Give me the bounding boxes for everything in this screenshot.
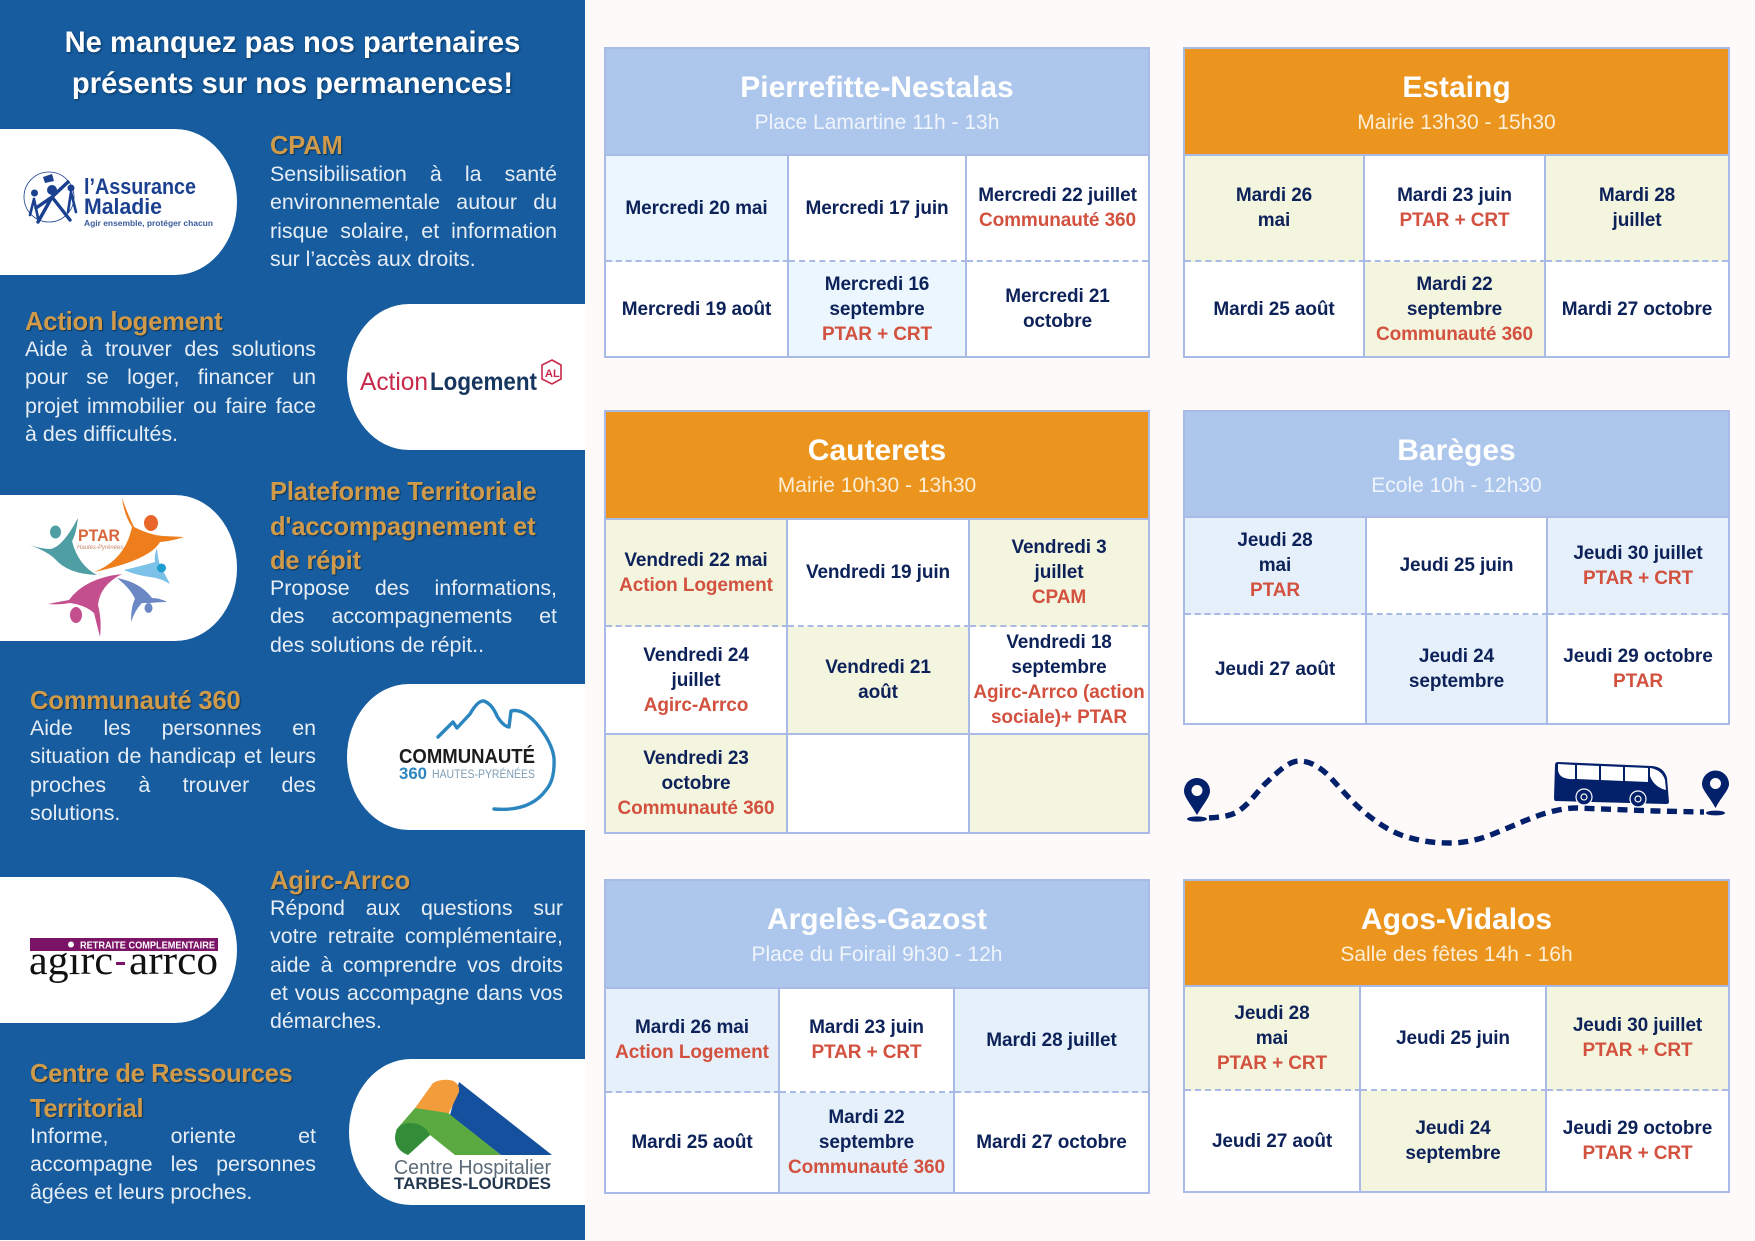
- date: 3 juillet: [970, 520, 1148, 627]
- logo pill: Communauté 360: HAUTES-PYRÉNÉES: [432, 768, 535, 781]
- illustration: bus route: [1184, 758, 1729, 846]
- date: 22 mai: Action Logement: [619, 574, 773, 596]
- schedule: Agos-Vidalos: [1183, 879, 1730, 1193]
- date: 21 août: Vendredi 21: [825, 657, 931, 678]
- logo pill: Action Logement: [347, 304, 585, 450]
- logo pill: Centre Hospitalier Tarbes-Lourdes: TARBES-LOURDES: [394, 1174, 551, 1193]
- schedule: Estaing: [1183, 47, 1730, 358]
- text: Centre de Ressources Territorial: [30, 1060, 316, 1204]
- logo pill: Action Logement: AL: [545, 368, 560, 380]
- text: CPAM: sur l’accès aux droits.: [270, 247, 476, 271]
- date: 27 octobre: Mardi 27 octobre: [976, 1132, 1127, 1153]
- text: Communauté 360: Aide les personnes en: [30, 716, 316, 740]
- date: 22 juillet: [967, 156, 1148, 262]
- date: 18 septembre: [970, 627, 1148, 735]
- date: 26 mai: [1185, 156, 1365, 262]
- date: 22 septembre: Mardi 22: [1416, 274, 1493, 294]
- header: Barèges: Barèges: [1397, 434, 1516, 467]
- date: 30 juillet: Jeudi 30 juillet: [1573, 1015, 1702, 1036]
- header: Agos-Vidalos: Agos-Vidalos: [1361, 903, 1552, 936]
- date: 27 août: [1185, 615, 1367, 723]
- heading: partners title: [65, 27, 521, 101]
- empty cell: [970, 735, 1148, 832]
- header: Cauterets: Cauterets: [808, 434, 946, 467]
- empty cell: [788, 735, 970, 832]
- date: 30 juillet: [1548, 518, 1728, 615]
- date: 16 septembre: [789, 262, 967, 356]
- schedule: Cauterets: [604, 410, 1150, 834]
- header: Pierrefitte-Nestalas: Pierrefitte-Nestalas: [740, 71, 1014, 104]
- date: 28 mai: mai: [1256, 1028, 1288, 1048]
- date: 22 septembre: Communauté 360: [1376, 324, 1533, 344]
- date: 16 septembre: septembre: [829, 298, 925, 320]
- logo pill: Assurance Maladie: Agir ensemble, protéger chacun: [84, 219, 213, 228]
- date: 17 juin: [789, 156, 967, 262]
- schedule: Argelès-Gazost: [604, 879, 1150, 1194]
- date: 30 juillet: PTAR + CRT: [1582, 1040, 1692, 1061]
- date: 23 juin: PTAR + CRT: [1399, 210, 1510, 231]
- date: 28 mai: mai: [1259, 555, 1291, 576]
- logo pill: Centre Hospitalier Tarbes-Lourdes: [349, 1059, 585, 1205]
- date: 17 juin: Mercredi 17 juin: [805, 198, 949, 218]
- date: 27 août: [1185, 1091, 1361, 1191]
- date: 28 juillet: [1546, 156, 1728, 262]
- text: Agirc-Arrco: aide à comprendre vos droits: [270, 953, 563, 977]
- text: Plateforme Territoriale: Propose des informations,: [270, 576, 557, 600]
- date: 24 juillet: Vendredi 24: [643, 644, 749, 666]
- logo pill: PTAR: Hautes-Pyrénées: [77, 545, 123, 551]
- date: 19 juin: [788, 520, 970, 627]
- date: 23 octobre: octobre: [662, 773, 730, 794]
- logo pill: Communauté 360: 360: [399, 764, 427, 783]
- date: 23 octobre: Communauté 360: [618, 798, 774, 819]
- header: Cauterets: Mairie 10h30 - 13h30: [778, 474, 976, 497]
- text: Communauté 360: Communauté 360: [30, 687, 241, 715]
- text: CPAM: CPAM: [270, 132, 343, 160]
- date: 22 septembre: [1365, 262, 1546, 356]
- date: 3 juillet: juillet: [1035, 562, 1083, 583]
- date: 27 août: Jeudi 27 août: [1215, 658, 1335, 680]
- header: Agos-Vidalos: Salle des fêtes 14h - 16h: [1340, 943, 1573, 966]
- logo pill: Agirc-Arrco: agirc: [29, 937, 113, 983]
- header: Argelès-Gazost: [606, 881, 1148, 989]
- text: Centre de Ressources Territorial: âgées et leurs proches.: [30, 1180, 252, 1204]
- date: 29 octobre: Jeudi 29 octobre: [1563, 646, 1713, 667]
- date: 24 septembre: Jeudi 24: [1419, 646, 1494, 667]
- text: Plateforme Territoriale: d'accompagnement et: [270, 512, 535, 540]
- icon: end pin: [1702, 770, 1729, 815]
- date: 18 septembre: sociale)+ PTAR: [991, 707, 1127, 728]
- date: 22 septembre: Mardi 22: [828, 1107, 905, 1128]
- text: CPAM: Sensibilisation à la santé: [270, 162, 557, 186]
- panel: partners sidebar: [0, 0, 585, 1240]
- text: Plateforme Territoriale: de répit: [270, 547, 361, 575]
- date: 25 juin: Jeudi 25 juin: [1396, 1028, 1510, 1048]
- text: Centre de Ressources Territorial: Territorial: [30, 1094, 143, 1122]
- logo pill: Assurance Maladie: l’Assurance: [84, 174, 196, 199]
- date: 22 septembre: septembre: [1407, 298, 1502, 320]
- date: 25 août: Mardi 25 août: [1213, 298, 1335, 320]
- date: 24 juillet: [606, 627, 788, 735]
- logo pill: Centre Hospitalier Tarbes-Lourdes: Centre Hospitalier: [394, 1157, 551, 1179]
- date: 19 juin: Vendredi 19 juin: [806, 562, 950, 583]
- header: Estaing: [1185, 49, 1728, 156]
- date: 25 juin: [1361, 987, 1547, 1091]
- date: 25 août: [1185, 262, 1365, 356]
- date: 24 septembre: [1367, 615, 1548, 723]
- date: 23 juin: Mardi 23 juin: [809, 1017, 924, 1038]
- date: 22 juillet: Communauté 360: [979, 210, 1136, 231]
- date: 22 septembre: [780, 1093, 955, 1192]
- date: 23 octobre: Vendredi 23: [643, 748, 749, 769]
- date: 20 mai: [606, 156, 789, 262]
- date: 23 juin: PTAR + CRT: [811, 1042, 922, 1063]
- date: 22 septembre: Communauté 360: [788, 1157, 945, 1178]
- logo pill: Assurance Maladie: Maladie: [84, 194, 162, 219]
- text: CPAM: environnementale autour du: [270, 190, 557, 214]
- date: 25 août: [606, 1093, 780, 1192]
- header: Barèges: Ecole 10h - 12h30: [1371, 474, 1542, 497]
- text: Action logement: [25, 308, 316, 446]
- header: Argelès-Gazost: Place du Foirail 9h30 - 12h: [752, 943, 1002, 966]
- date: 26 mai: Mardi 26: [1236, 185, 1312, 206]
- text: Plateforme Territoriale: Plateforme Territoriale: [270, 478, 537, 506]
- date: 22 mai: [606, 520, 788, 627]
- date: 23 juin: [1365, 156, 1546, 262]
- date: 16 septembre: Mercredi 16: [825, 274, 929, 294]
- logo pill: Action Logement: Logement: [430, 368, 538, 396]
- text: Plateforme Territoriale: des solutions de répit..: [270, 633, 484, 657]
- text: Agirc-Arrco: et vous accompagne dans vos: [270, 981, 563, 1005]
- date: 21 octobre: octobre: [1023, 311, 1092, 332]
- date: 19 août: [606, 262, 789, 356]
- text: Centre de Ressources Territorial: Informe, oriente et: [30, 1124, 316, 1148]
- date: 28 mai: PTAR: [1250, 580, 1300, 601]
- date: 28 mai: [1185, 518, 1367, 615]
- date: 28 juillet: Mardi 28: [1599, 185, 1675, 206]
- text: Centre de Ressources Territorial: Centre de Ressources: [30, 1060, 292, 1088]
- date: 23 juin: [780, 989, 955, 1093]
- text: Action logement: projet immobilier ou faire face: [25, 394, 316, 418]
- date: 21 octobre: [1005, 286, 1110, 332]
- date: 21 août: août: [858, 682, 898, 703]
- logo pill: Agirc-Arrco: RETRAITE COMPLEMENTAIRE: [80, 940, 215, 952]
- date: 21 octobre: Mercredi 21: [1005, 286, 1110, 307]
- date: 18 septembre: Vendredi 18: [1006, 632, 1112, 653]
- heading: partners title: présents sur nos permanences!: [72, 68, 513, 100]
- text: Plateforme Territoriale: [270, 478, 557, 657]
- text: Action logement: Aide à trouver des solutions: [25, 337, 316, 361]
- header: Barèges: [1185, 412, 1728, 518]
- date: 24 septembre: septembre: [1409, 671, 1504, 692]
- date: 22 mai: Vendredi 22 mai: [624, 550, 768, 570]
- date: 26 mai: mai: [1258, 210, 1290, 231]
- text: CPAM: [270, 132, 557, 271]
- date: 26 mai: Mardi 26 mai: [635, 1017, 749, 1038]
- date: 22 juillet: Mercredi 22 juillet: [978, 185, 1137, 206]
- logo pill: PTAR: [0, 495, 237, 641]
- text: Action logement: pour se loger, financer un: [25, 365, 316, 389]
- header: Pierrefitte-Nestalas: Place Lamartine 11h - 13h: [755, 111, 999, 134]
- logo pill: Action Logement: Action: [360, 368, 428, 396]
- text: Communauté 360: [30, 687, 316, 825]
- date: 27 octobre: Mardi 27 octobre: [1562, 298, 1712, 320]
- route: dashed line: [1209, 761, 1704, 843]
- date: 28 mai: PTAR + CRT: [1217, 1052, 1327, 1074]
- date: 24 juillet: juillet: [672, 670, 720, 690]
- text: Action logement: à des difficultés.: [25, 422, 178, 446]
- date: 21 août: [788, 627, 970, 735]
- date: 29 octobre: PTAR: [1613, 671, 1663, 692]
- date: 27 août: Jeudi 27 août: [1212, 1130, 1332, 1152]
- heading: partners title: Ne manquez pas nos partenaires: [65, 27, 520, 59]
- date: 24 juillet: Agirc-Arrco: [644, 694, 748, 716]
- text: Agirc-Arrco: [270, 867, 563, 1033]
- date: 23 juin: Mardi 23 juin: [1397, 185, 1512, 206]
- date: 25 août: Mardi 25 août: [631, 1132, 753, 1153]
- date: 30 juillet: PTAR + CRT: [1583, 568, 1693, 588]
- date: 18 septembre: septembre: [1011, 657, 1107, 678]
- header: Cauterets: [606, 412, 1148, 520]
- date: 29 octobre: Jeudi 29 octobre: [1563, 1118, 1712, 1139]
- date: 26 mai: [606, 989, 780, 1093]
- date: 28 juillet: juillet: [1613, 210, 1661, 231]
- date: 30 juillet: Jeudi 30 juillet: [1573, 542, 1703, 564]
- text: Agirc-Arrco: votre retraite complémentaire,: [270, 924, 563, 948]
- text: CPAM: risque solaire, et information: [270, 219, 557, 243]
- header: Estaing: Mairie 13h30 - 15h30: [1357, 111, 1556, 134]
- logo pill: Assurance Maladie: [0, 129, 237, 275]
- date: 28 mai: [1185, 987, 1361, 1091]
- text: Agirc-Arrco: Agirc-Arrco: [270, 867, 410, 895]
- date: 3 juillet: CPAM: [1032, 587, 1086, 608]
- logo pill: PTAR: PTAR: [78, 526, 120, 545]
- date: 24 septembre: septembre: [1405, 1143, 1501, 1164]
- logo pill: Communauté 360: COMMUNAUTÉ: [399, 745, 535, 768]
- icon: bus: [1554, 762, 1669, 807]
- text: Communauté 360: situation de handicap et leurs: [30, 744, 316, 768]
- text: Agirc-Arrco: démarches.: [270, 1009, 382, 1033]
- text: Communauté 360: solutions.: [30, 801, 120, 825]
- date: 28 juillet: [955, 989, 1148, 1093]
- icon: start pin: [1184, 778, 1210, 822]
- date: 30 juillet: [1547, 987, 1728, 1091]
- date: 28 juillet: Mardi 28 juillet: [986, 1030, 1117, 1050]
- text: Centre de Ressources Territorial: accompagne les personnes: [30, 1152, 316, 1176]
- date: 26 mai: Action Logement: [615, 1042, 769, 1063]
- date: 29 octobre: [1563, 1118, 1712, 1164]
- logo pill: Agirc-Arrco: arrco: [129, 937, 218, 983]
- date: 28 mai: Jeudi 28: [1237, 530, 1313, 551]
- text: Plateforme Territoriale: des accompagnements et: [270, 604, 557, 628]
- header: Agos-Vidalos: [1185, 881, 1728, 987]
- header: Estaing: Estaing: [1402, 71, 1511, 104]
- date: 22 septembre: septembre: [819, 1132, 914, 1153]
- date: 29 octobre: [1563, 646, 1713, 692]
- text: Agirc-Arrco: Répond aux questions sur: [270, 896, 563, 920]
- date: 16 septembre: PTAR + CRT: [822, 324, 932, 344]
- date: 18 septembre: Agirc-Arrco (action: [973, 682, 1145, 703]
- header: Argelès-Gazost: Argelès-Gazost: [767, 903, 987, 936]
- text: Communauté 360: proches à trouver des: [30, 773, 316, 797]
- logo pill: Communauté 360: [347, 684, 585, 830]
- date: 23 octobre: [606, 735, 788, 832]
- date: 24 septembre: Jeudi 24: [1415, 1118, 1491, 1139]
- date: 25 juin: [1367, 518, 1548, 615]
- date: 24 septembre: [1361, 1091, 1547, 1191]
- logo pill: Agirc-Arrco: [0, 877, 237, 1023]
- schedule: Pierrefitte-Nestalas: [604, 47, 1150, 358]
- date: 20 mai: Mercredi 20 mai: [625, 198, 768, 218]
- date: 3 juillet: Vendredi 3: [1011, 537, 1107, 558]
- date: 28 mai: Jeudi 28: [1234, 1002, 1310, 1024]
- text: Action logement: Action logement: [25, 308, 222, 336]
- schedule: Barèges: [1183, 410, 1730, 725]
- date: 19 août: Mercredi 19 août: [622, 298, 771, 320]
- header: Pierrefitte-Nestalas: [606, 49, 1148, 156]
- date: 25 juin: Jeudi 25 juin: [1400, 555, 1513, 576]
- date: 29 octobre: PTAR + CRT: [1582, 1143, 1692, 1164]
